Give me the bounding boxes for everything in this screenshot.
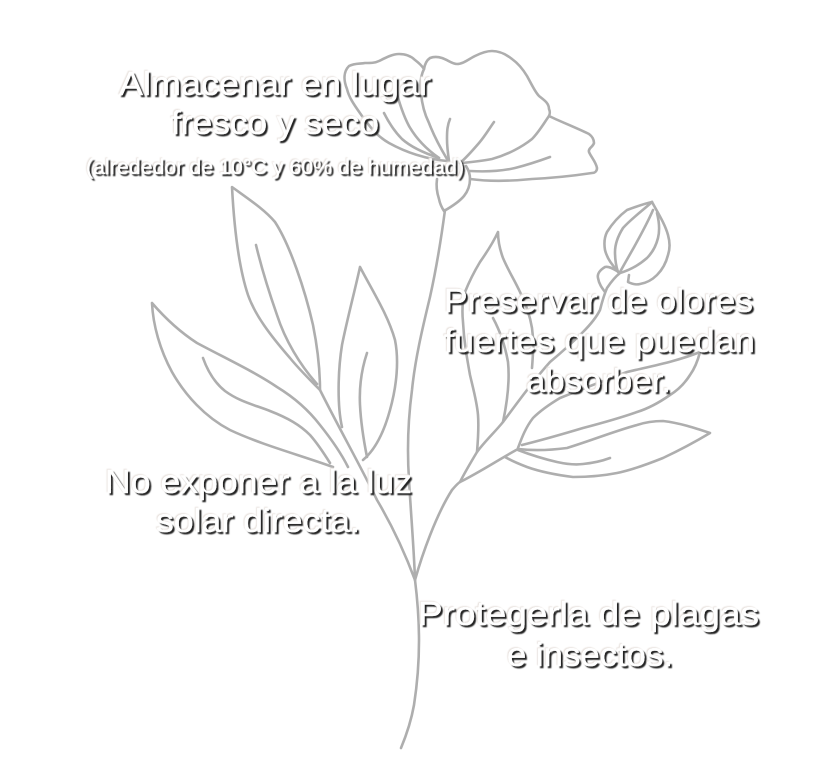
leaf vein: upper left bbox=[256, 245, 317, 384]
flower bbox=[345, 51, 597, 211]
leaf: small centre bbox=[339, 267, 397, 460]
leaf: right lower wide bbox=[460, 421, 710, 482]
flower bud bbox=[598, 202, 670, 292]
leaf vein: small centre bbox=[360, 353, 367, 457]
text block: protect from pests: e insectos. bbox=[507, 636, 673, 673]
text block: keep away from strong odours: fuertes que puedan bbox=[444, 322, 755, 359]
text block: store in a cool dry place bbox=[86, 65, 464, 179]
leaf: upper left bbox=[232, 187, 320, 390]
text block: no direct sunlight bbox=[105, 463, 412, 539]
leaf vein: lower left bbox=[203, 358, 330, 463]
text block: store in a cool dry place: Almacenar en lugar bbox=[119, 65, 431, 102]
left branch bbox=[320, 390, 415, 580]
text block: store in a cool dry place: (alrededor de 10°C y 60% de humedad) bbox=[86, 156, 464, 179]
text block: store in a cool dry place: fresco y seco bbox=[171, 104, 379, 141]
text block: keep away from strong odours: Preservar de olores bbox=[444, 282, 753, 319]
text block: no direct sunlight: No exponer a la luz bbox=[105, 463, 412, 500]
leaf: right upper wide bbox=[518, 352, 700, 448]
plant line illustration bbox=[152, 51, 710, 748]
leaf: lower left bbox=[152, 303, 348, 467]
right branch bbox=[415, 273, 620, 580]
text block: keep away from strong odours: absorber. bbox=[526, 362, 671, 399]
text block: no direct sunlight: solar directa. bbox=[156, 502, 360, 539]
main stem bbox=[401, 210, 445, 748]
text block: keep away from strong odours bbox=[444, 282, 755, 399]
leaf vein: right lower wide bbox=[518, 450, 610, 464]
text block: protect from pests: Protegerla de plagas bbox=[418, 595, 759, 632]
leaf: tall right bbox=[462, 232, 533, 452]
text block: protect from pests bbox=[418, 595, 759, 673]
leaf vein: tall right bbox=[493, 318, 509, 422]
